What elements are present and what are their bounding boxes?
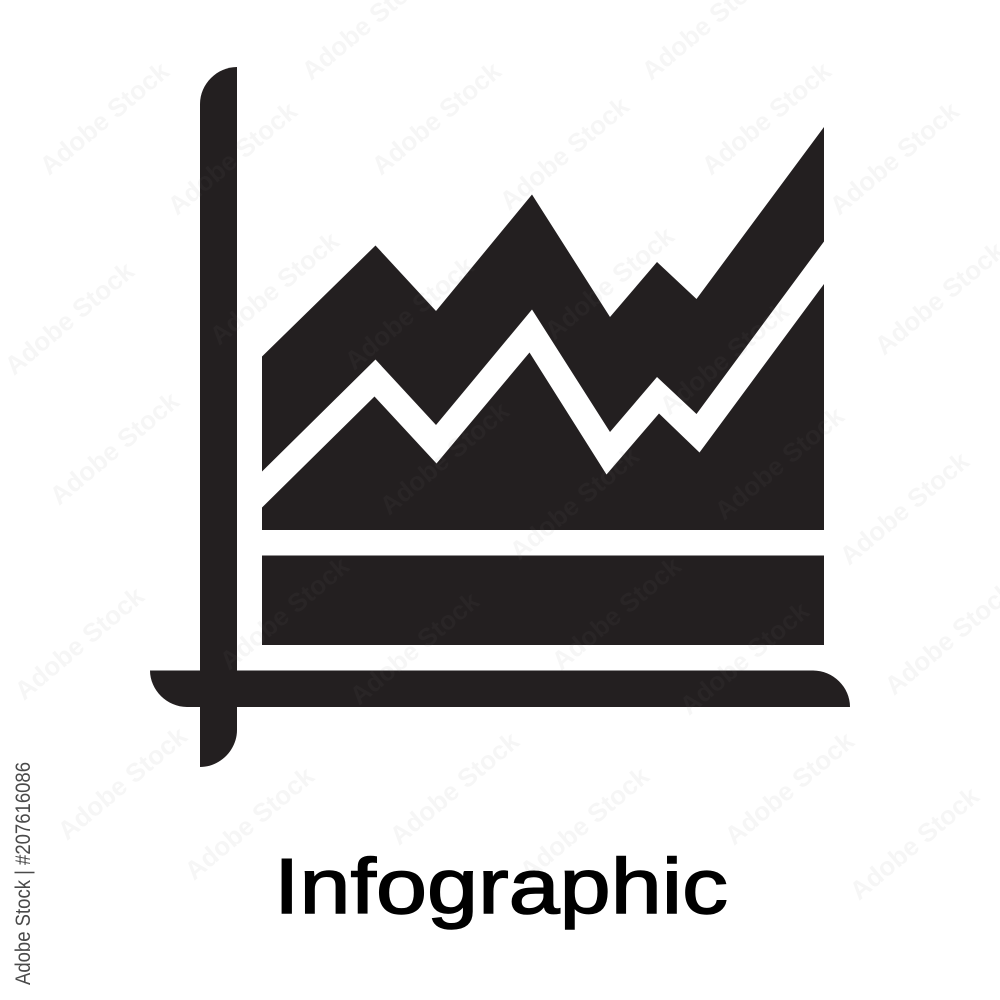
watermark pattern: Adobe Stock [52,720,193,846]
upper area series [262,127,824,472]
watermark pattern: Adobe Stock [366,55,507,181]
watermark pattern: Adobe Stock [494,90,635,216]
vertical axis [200,67,237,767]
watermark pattern: Adobe Stock [344,585,485,711]
watermark pattern: Adobe Stock [179,760,320,886]
watermark pattern: Adobe Stock [514,760,655,886]
watermark pattern: Adobe Stock [9,580,150,706]
watermark pattern: Adobe Stock [374,395,515,521]
watermark pattern: Adobe Stock [654,295,795,421]
watermark pattern: Adobe Stock [204,225,345,351]
watermark pattern: Adobe Stock [162,95,303,221]
watermark pattern: Adobe Stock [339,250,480,376]
side credit: Adobe Stock | #207616086 [12,762,35,985]
watermark pattern: Adobe Stock [674,595,815,721]
watermark pattern: Adobe Stock [696,55,837,181]
watermark pattern: Adobe Stock [44,385,185,511]
watermark pattern: Adobe Stock [844,780,985,906]
lower area series [262,284,824,530]
baseline bar [262,556,824,645]
watermark pattern: Adobe Stock [384,725,525,851]
horizontal axis [150,670,850,707]
watermark pattern: Adobe Stock [0,255,140,381]
watermark pattern: Adobe Stock [719,725,860,851]
watermark pattern: Adobe Stock [834,445,975,571]
watermark pattern: Adobe Stock [34,55,175,181]
title: Infographic [274,842,728,930]
watermark pattern: Adobe Stock [214,550,355,676]
watermark pattern: Adobe Stock [824,95,965,221]
watermark pattern: Adobe Stock [709,400,850,526]
icon: area chart [150,67,850,767]
watermark pattern: Adobe Stock [504,440,645,566]
watermark pattern: Adobe Stock [546,550,687,676]
watermark pattern: Adobe Stock [539,220,680,346]
